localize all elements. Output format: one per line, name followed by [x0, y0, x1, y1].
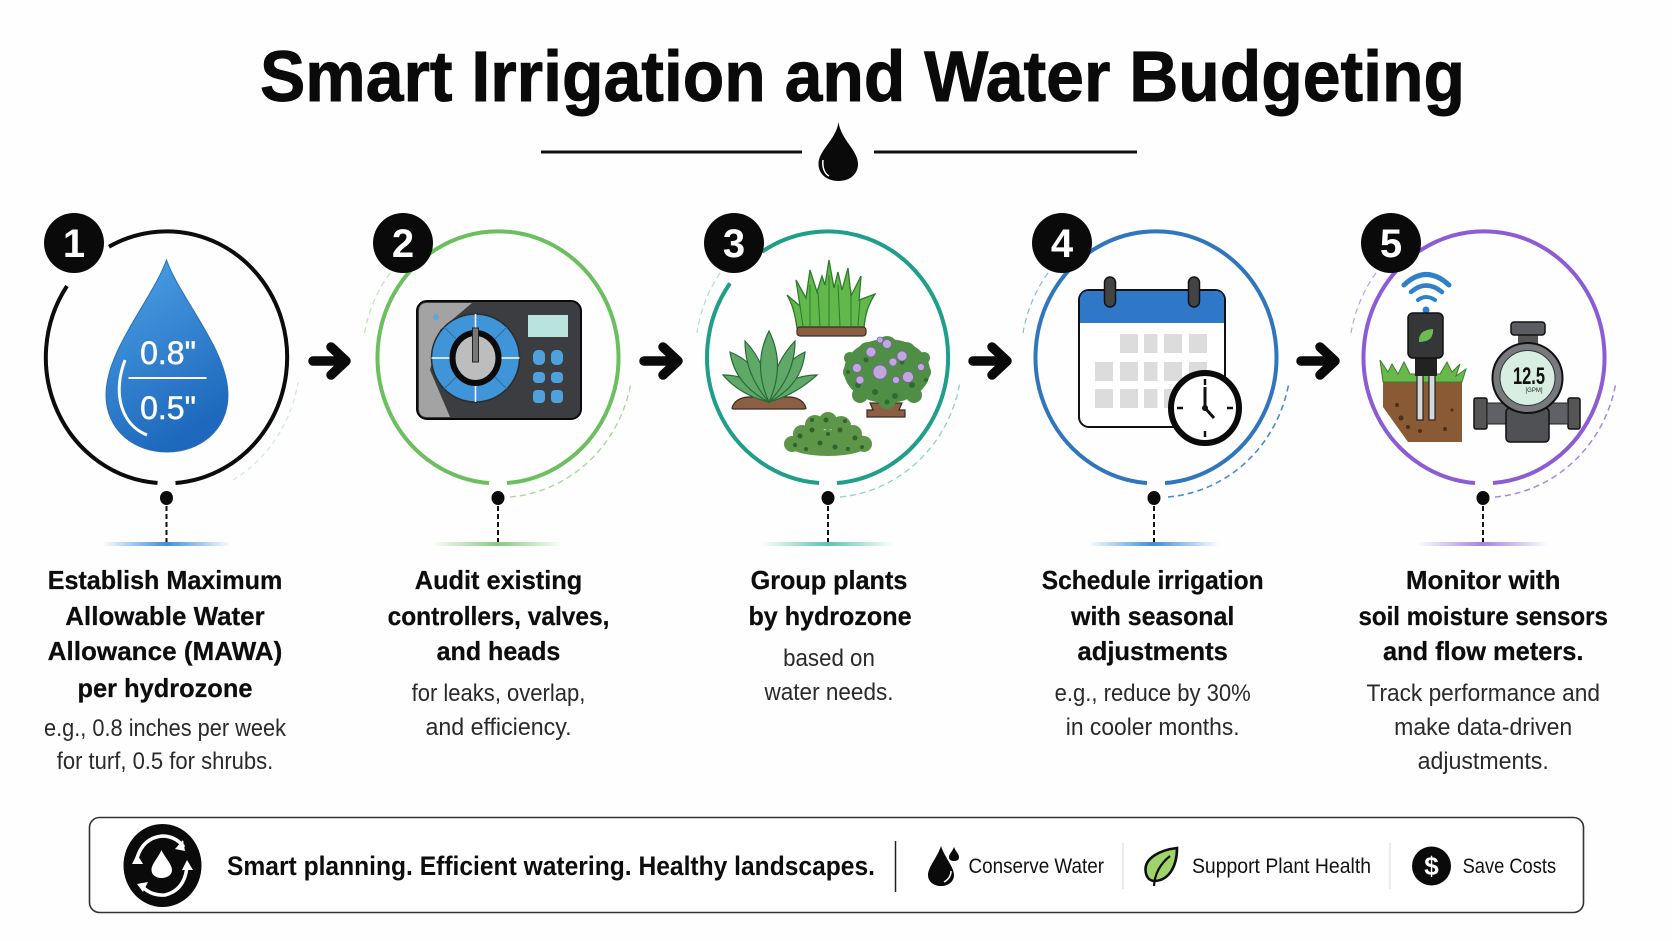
- step 1 text: Establish Maximum: [48, 565, 282, 595]
- step 1 text: Allowance (MAWA): [48, 636, 282, 666]
- step 3 text: based on: [783, 645, 875, 672]
- step 1 connector: [102, 491, 231, 546]
- step 2 text: controllers, valves,: [388, 601, 609, 631]
- step 5 text: [1358, 565, 1608, 775]
- benefit: support plant health: Support Plant Health: [1192, 855, 1371, 878]
- step 5 ring: [1351, 231, 1616, 497]
- icon: agave succulent: [723, 331, 817, 409]
- icon: flow meter: [1474, 322, 1580, 442]
- tagline: Smart planning. Efficient watering. Healthy landscapes.: [227, 851, 875, 881]
- step 5 number badge: 5: [1380, 222, 1402, 266]
- step 5 text: Track performance and: [1366, 680, 1600, 707]
- icon: turf grass: [787, 260, 875, 336]
- icon: calendar with clock: [1079, 277, 1239, 443]
- step 4 text: Schedule irrigation: [1042, 565, 1264, 595]
- arrow 3 to 4: [973, 347, 1007, 375]
- step 1 text: e.g., 0.8 inches per week: [44, 715, 287, 742]
- step 1 text: per hydrozone: [78, 673, 252, 703]
- step 2 text: and efficiency.: [425, 714, 572, 741]
- step 3 number badge: [704, 213, 764, 273]
- step 2 number badge: 2: [392, 222, 414, 266]
- arrow 4 to 5: [1301, 347, 1335, 375]
- step 5 text: soil moisture sensors: [1358, 601, 1608, 631]
- step 1 number badge: 1: [63, 222, 85, 266]
- icon: soil moisture sensor: [1380, 274, 1466, 442]
- step 2 connector: [432, 491, 563, 546]
- step 3 text: by hydrozone: [748, 601, 912, 631]
- icon: irrigation controller: [417, 301, 581, 419]
- step 3 connector: [762, 491, 893, 546]
- step 4 text: [1042, 565, 1264, 741]
- step 1 text: [44, 565, 287, 775]
- panel: step 2: [364, 213, 631, 741]
- step 2 text: for leaks, overlap,: [412, 680, 585, 707]
- step 3 number badge: 3: [723, 222, 745, 266]
- step 4 text: adjustments: [1078, 636, 1228, 666]
- icon: flowering shrub: [843, 336, 931, 417]
- step 5 text: and flow meters.: [1383, 636, 1583, 666]
- panel: step 4: [1023, 213, 1289, 741]
- arrow 1 to 2: [313, 347, 346, 375]
- step 5 connector: [1417, 491, 1548, 546]
- step 1 text: Allowable Water: [65, 601, 265, 631]
- step 5 text: adjustments.: [1418, 748, 1549, 775]
- icon: flow meter: 12.5: [1513, 363, 1545, 390]
- benefit: conserve water: [928, 846, 1104, 886]
- step 4 ring: [1023, 231, 1289, 497]
- step 2 text: Audit existing: [415, 565, 582, 595]
- step 5 number badge: [1361, 213, 1421, 273]
- icon: flow meter: [GPM]: [1525, 388, 1543, 394]
- icon: water drop with 0.8 and 0.5 inch values: 0.8": [140, 335, 196, 371]
- step 4 number badge: [1032, 213, 1092, 273]
- step 4 connector: [1088, 491, 1219, 546]
- title divider with water drop: [541, 122, 1137, 181]
- icon: water drop with 0.8 and 0.5 inch values: 0.5": [140, 390, 196, 426]
- step 2 text: [388, 565, 609, 741]
- benefit: save costs: $: [1424, 851, 1439, 881]
- benefit: conserve water: Conserve Water: [968, 855, 1104, 878]
- icon: water cycle drop: [124, 824, 202, 907]
- step 4 text: with seasonal: [1070, 601, 1234, 631]
- benefit: support plant health: [1145, 848, 1371, 886]
- step 4 number badge: 4: [1051, 222, 1074, 266]
- step 5 text: Monitor with: [1406, 565, 1560, 595]
- step 2 number badge: [373, 213, 433, 273]
- panel: bottom summary banner: [90, 818, 1584, 912]
- panel: step 5: [1351, 213, 1616, 775]
- step 2 ring: [364, 231, 631, 497]
- arrow 2 to 3: [644, 347, 678, 375]
- benefit: save costs: [1412, 846, 1556, 886]
- step 1 ring: [46, 231, 298, 483]
- step 3 ring: [697, 231, 960, 497]
- step 1 text: for turf, 0.5 for shrubs.: [57, 748, 273, 775]
- step 4 text: in cooler months.: [1066, 714, 1240, 741]
- panel: step 3: [697, 213, 960, 706]
- step 3 text: Group plants: [751, 565, 907, 595]
- panel: step 1: [44, 213, 298, 775]
- step 2 text: and heads: [437, 636, 560, 666]
- step 3 text: [748, 565, 912, 706]
- step 1 number badge: [44, 213, 104, 273]
- icon: ground cover: [784, 412, 872, 456]
- step 3 text: water needs.: [764, 679, 894, 706]
- step 5 text: make data-driven: [1394, 714, 1572, 741]
- benefit: save costs: Save Costs: [1463, 855, 1556, 878]
- step 4 text: e.g., reduce by 30%: [1055, 680, 1251, 707]
- title: Smart Irrigation and Water Budgeting: [260, 38, 1465, 117]
- icon: water drop with 0.8 and 0.5 inch values: [106, 260, 228, 452]
